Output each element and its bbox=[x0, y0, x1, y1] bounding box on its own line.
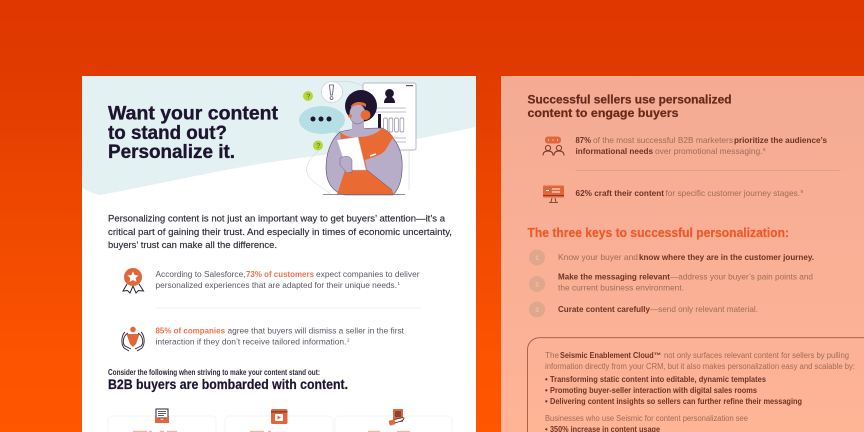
heading: B2B buyers: B2B buyers are bombarded with content. bbox=[108, 377, 348, 392]
callout: Seismic Enablement Cloud: Businesses who use Seismic for content personalization see bbox=[545, 414, 748, 423]
clipped stat figures bbox=[133, 431, 410, 432]
bullet list: • bbox=[545, 375, 548, 384]
bullet list: Promoting buyer-seller interaction with digital sales rooms bbox=[550, 386, 758, 395]
stat: 87% bbox=[576, 136, 827, 156]
stat: 62%: for specific customer journey stages. bbox=[666, 189, 800, 198]
key 1: Know your buyer and bbox=[558, 252, 638, 262]
stat: 73% of customers bbox=[156, 269, 420, 290]
title: Personalize it. bbox=[108, 141, 235, 163]
icon: award bbox=[123, 268, 144, 293]
speech bubble bbox=[299, 106, 345, 136]
stat: 73% of customers: 1 bbox=[398, 281, 400, 286]
key 2 bbox=[529, 272, 813, 292]
stat: 73% of customers: 73% of customers bbox=[246, 269, 314, 279]
stat: 73% of customers: According to Salesforce, bbox=[156, 269, 246, 279]
stat: 85% of companies: agree that buyers will dismiss a seller in the first bbox=[228, 326, 405, 336]
stat: 73% of customers: expect companies to deliver bbox=[316, 269, 420, 279]
bullet list bbox=[545, 375, 802, 406]
key 2: Make the messaging relevant bbox=[558, 272, 670, 282]
stat: 87%: informational needs bbox=[576, 147, 653, 156]
callout: Seismic Enablement Cloud: The bbox=[545, 351, 559, 360]
stat: 73% of customers: personalized experiences that are adapted for their unique needs. bbox=[156, 280, 397, 290]
callout: Seismic Enablement Cloud: not only surfaces relevant content for sellers by pulling bbox=[664, 351, 849, 360]
stat: 87%: of the most successful B2B marketers bbox=[593, 136, 733, 145]
question marks: ? bbox=[316, 143, 320, 150]
key 3: Curate content carefully bbox=[558, 304, 650, 314]
stat: 87%: 87% bbox=[576, 136, 592, 145]
stat: 85% of companies: 2 bbox=[347, 338, 350, 342]
bullet list: Transforming static content into editable, dynamic templates bbox=[550, 375, 767, 384]
stat: 62% bbox=[576, 189, 804, 198]
heading: three keys: The three keys to successful personalization: bbox=[528, 226, 789, 240]
intro paragraph: critical part of gaining their trust. And especially in times of economic uncertainty, bbox=[108, 227, 452, 238]
key 2: the current business environment. bbox=[558, 282, 684, 292]
stat: 87%: prioritize the audience’s bbox=[734, 136, 827, 145]
key 1: 1 bbox=[535, 255, 539, 262]
window card bbox=[307, 81, 416, 195]
title: Want your content bbox=[108, 102, 279, 124]
stat: 85% of companies bbox=[156, 326, 405, 346]
icon: document in hand bbox=[389, 409, 404, 426]
icon: video bbox=[271, 409, 288, 424]
heading: successful sellers bbox=[528, 94, 732, 120]
key 2: 2 bbox=[535, 282, 539, 288]
stat: 62%: 9 bbox=[800, 189, 804, 194]
stat: 87%: over promotional messaging. bbox=[655, 147, 762, 156]
icon: people chatting bbox=[543, 136, 564, 156]
key 3: 3 bbox=[535, 307, 539, 314]
subheading: Consider the following when striving to make your content stand out: bbox=[108, 368, 320, 377]
intro paragraph: Personalizing content is not just an important way to get buyers’ attention—it’s a bbox=[108, 214, 446, 224]
key 2: —address your buyer’s pain points and bbox=[670, 272, 813, 282]
key 3: —send only relevant material. bbox=[650, 304, 758, 314]
intro paragraph: buyers’ trust can make all the difference. bbox=[108, 240, 277, 251]
callout: Seismic Enablement Cloud: information directly from your CRM, but it also makes personalization easy and scalable by: bbox=[545, 362, 855, 371]
stat cards bbox=[108, 409, 452, 432]
stat: 85% of companies: 85% of companies bbox=[156, 326, 225, 336]
callout: Seismic Enablement Cloud: Seismic Enablement Cloud™ bbox=[560, 351, 661, 360]
title bbox=[108, 102, 279, 163]
icon: hands holding person bbox=[122, 327, 144, 351]
illustration: woman with notepad bbox=[299, 81, 416, 195]
callout: Seismic Enablement Cloud bbox=[528, 338, 864, 432]
stat: 85% of companies: interaction if they don’t receive tailored information. bbox=[156, 336, 346, 346]
heading: successful sellers: content to engage buyers bbox=[528, 108, 678, 120]
header wave bbox=[82, 76, 476, 195]
figure bbox=[323, 90, 405, 195]
heading: successful sellers: Successful sellers use personalized bbox=[528, 94, 732, 106]
key 3 bbox=[529, 302, 758, 318]
question marks bbox=[303, 91, 323, 150]
bullet list: • bbox=[545, 397, 548, 406]
stat: 62%: 62% craft their content bbox=[576, 189, 664, 198]
stat: 87%: 8 bbox=[763, 147, 766, 152]
key 1 bbox=[529, 250, 814, 266]
key 1: know where they are in the customer journey. bbox=[639, 252, 814, 262]
bullet list: • bbox=[545, 386, 548, 395]
bullet list: Delivering content insights so sellers can further refine their messaging bbox=[550, 397, 802, 406]
icon: email bbox=[155, 409, 169, 423]
panel: right page bbox=[501, 76, 864, 432]
panel: left page bbox=[82, 76, 476, 432]
question marks: ? bbox=[306, 94, 310, 100]
exclamation bubble bbox=[322, 82, 342, 102]
title: to stand out? bbox=[108, 122, 227, 144]
icon: monitor bbox=[543, 186, 564, 202]
intro paragraph bbox=[108, 214, 452, 251]
